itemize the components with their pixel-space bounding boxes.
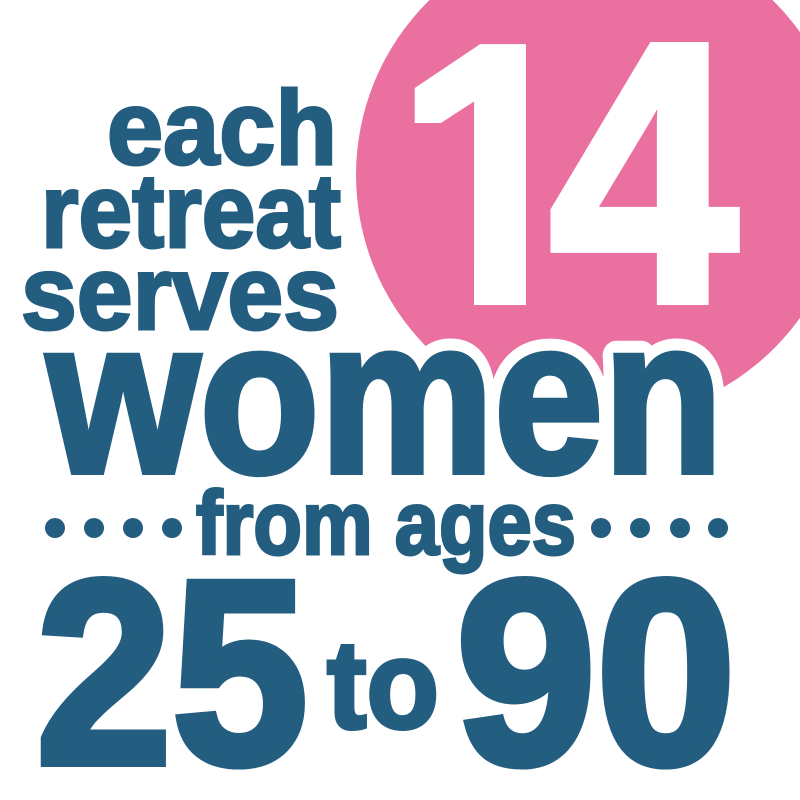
word: to: to: [327, 616, 439, 755]
word: women: women: [46, 273, 723, 519]
pink circle: [356, 0, 800, 420]
text: from ages: from ages: [196, 474, 576, 574]
heading: each retreat serves: [21, 70, 341, 352]
right dots: [591, 518, 728, 538]
number 14: [414, 42, 740, 305]
word: women: women: [46, 273, 723, 519]
heading: each retreat serves: each: [107, 70, 337, 187]
heading: each retreat serves: retreat: [41, 153, 341, 270]
left dots: [45, 518, 182, 538]
white backing behind the letter counters: [510, 378, 700, 470]
heading: each retreat serves: serves: [21, 235, 339, 352]
